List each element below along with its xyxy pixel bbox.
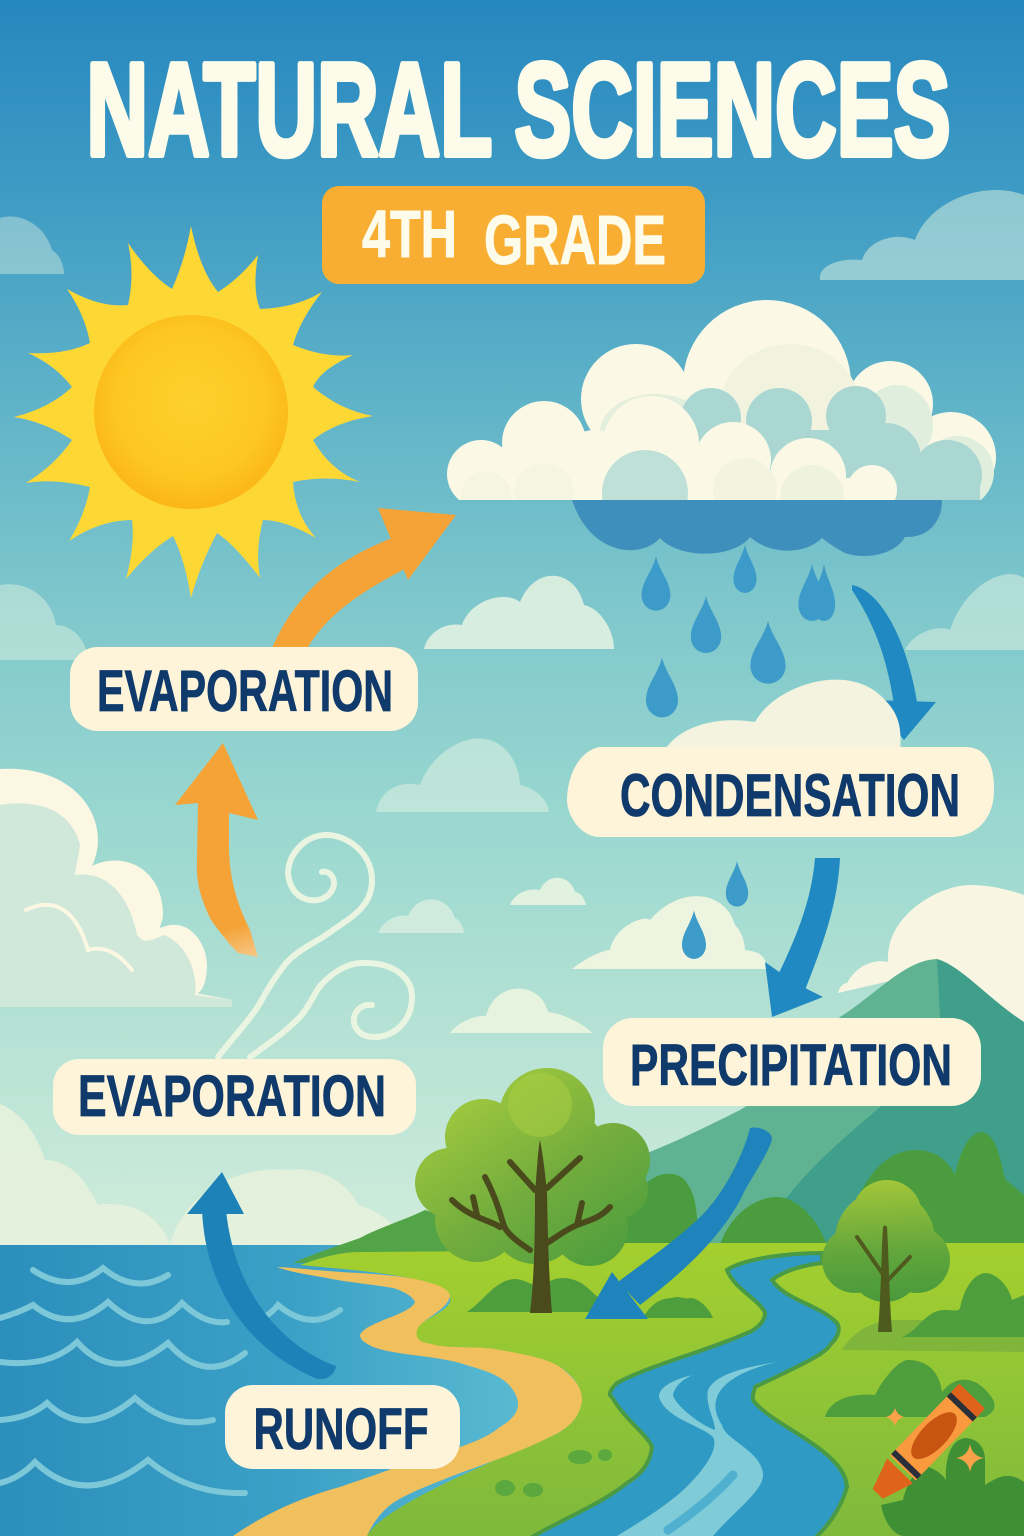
green hill: [293, 1210, 580, 1263]
label: evaporation lower: EVAPORATION: [78, 1064, 386, 1129]
cloud puffs: [447, 300, 996, 500]
cloud behind condensation: [660, 680, 901, 760]
arrow: condensation to precipitation: [765, 858, 840, 1017]
ground bushes: [467, 1273, 1024, 1536]
sea: [0, 1245, 640, 1536]
main rain cloud: [447, 300, 996, 556]
arrow: rain to condensation: [852, 585, 936, 740]
raindrops: [642, 544, 835, 959]
grade badge: [322, 186, 705, 284]
arrow: sun to cloud: [272, 508, 456, 650]
arrow: precipitation to land: [585, 1127, 772, 1319]
big tree: [415, 1068, 650, 1313]
label: precipitation: [603, 1018, 981, 1106]
river: [527, 1253, 847, 1536]
grade badge: GRADE: [484, 201, 666, 279]
icon: crayon: [865, 1384, 985, 1506]
label: evaporation upper: [70, 647, 418, 731]
label: condensation: [567, 747, 994, 837]
distant bushes: [620, 1127, 1024, 1245]
grass tufts: [495, 1449, 612, 1497]
icon: sun: [14, 226, 373, 598]
small tree: [822, 1180, 950, 1332]
arrow: rising evaporation: [175, 743, 258, 957]
label: runoff: [225, 1385, 460, 1469]
beach: [233, 1267, 582, 1536]
wind swirls: [218, 835, 412, 1057]
grade badge: 4TH: [362, 197, 457, 272]
arrow: runoff to sea: [187, 1172, 336, 1379]
cloud shadow base: [572, 500, 942, 556]
sparkles: [886, 1408, 984, 1472]
river inner channel: [668, 1475, 733, 1530]
label: runoff: RUNOFF: [254, 1397, 428, 1462]
sea waves: [0, 1268, 340, 1493]
river highlights: [617, 1362, 777, 1536]
background clouds: [0, 190, 1024, 1245]
mountain shaded face: [750, 959, 1024, 1260]
label: evaporation upper: EVAPORATION: [97, 659, 393, 724]
mountain: [620, 959, 950, 1260]
land: [300, 1243, 1024, 1536]
label: evaporation lower: [53, 1059, 416, 1135]
